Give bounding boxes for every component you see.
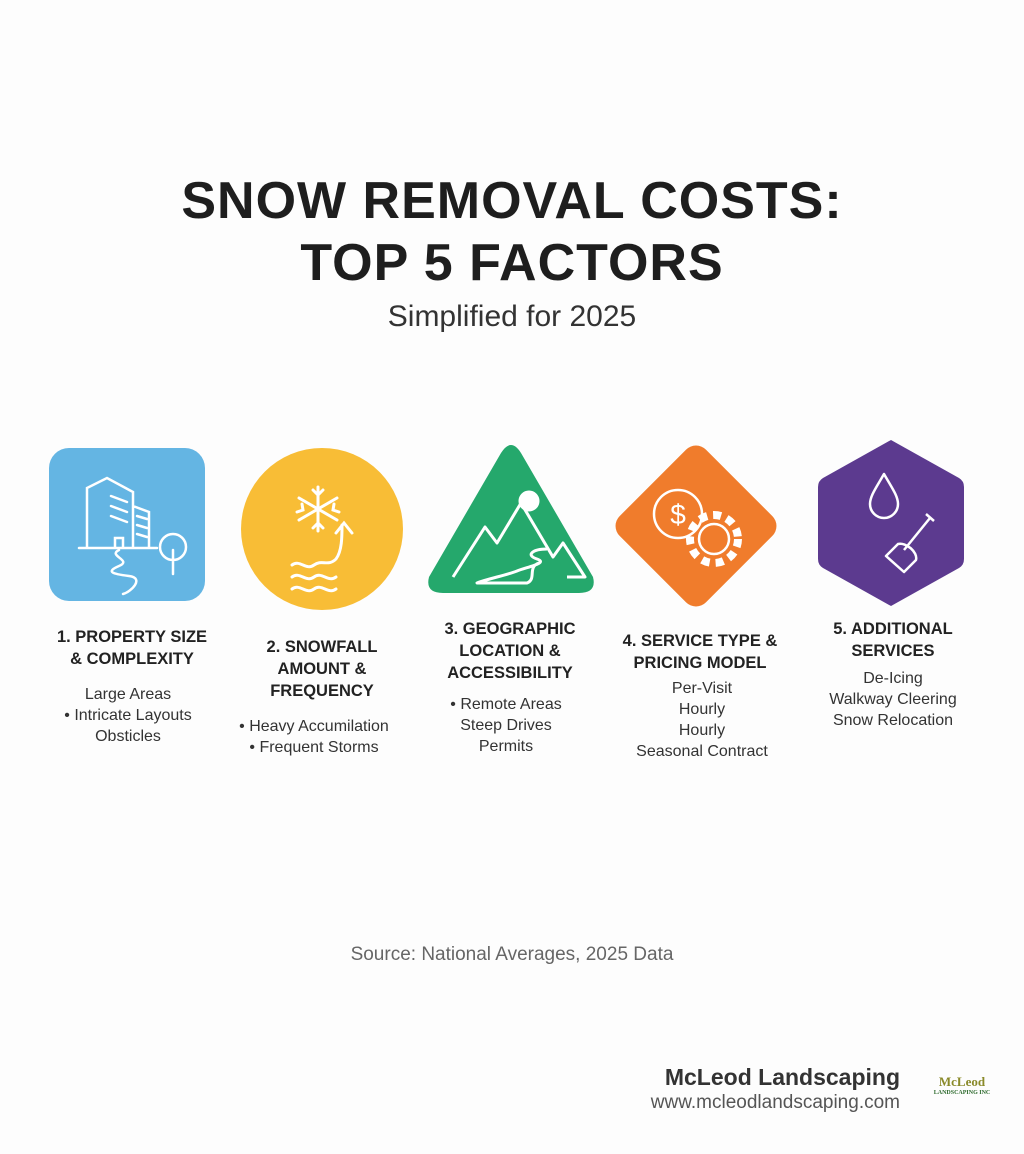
label 5: SERVICES xyxy=(851,642,935,660)
items 2: • Frequent Storms xyxy=(249,739,379,756)
title: SNOW REMOVAL COSTS: xyxy=(181,172,843,230)
icon: snowfall xyxy=(241,448,403,610)
logo: McLeod xyxy=(939,1074,985,1089)
items 3: Steep Drives xyxy=(460,717,552,734)
items 4: Seasonal Contract xyxy=(636,743,768,760)
items 3 xyxy=(450,696,562,755)
items 1: • Intricate Layouts xyxy=(64,707,192,724)
label 2 xyxy=(267,638,377,700)
label 2: AMOUNT & xyxy=(278,660,366,678)
items 4: Per-Visit xyxy=(672,680,732,697)
source note: Source: National Averages, 2025 Data xyxy=(351,944,673,965)
label 3 xyxy=(444,620,576,682)
items 1: Large Areas xyxy=(85,686,171,703)
items 5 xyxy=(829,670,957,729)
label 5 xyxy=(833,620,953,660)
icon: property size xyxy=(49,448,205,601)
label 1 xyxy=(57,628,207,668)
icon: service type: $ xyxy=(670,499,686,530)
label 2: 2. SNOWFALL xyxy=(267,638,377,656)
logo: LANDSCAPING INC xyxy=(934,1090,990,1096)
items 2: • Heavy Accumilation xyxy=(239,718,389,735)
label 1: 1. PROPERTY SIZE xyxy=(57,628,207,646)
logo xyxy=(934,1074,990,1096)
title xyxy=(181,172,843,292)
items 3: • Remote Areas xyxy=(450,696,562,713)
icon: service type xyxy=(616,446,776,606)
subtitle: Simplified for 2025 xyxy=(388,300,636,333)
items 3: Permits xyxy=(479,738,533,755)
icon: geographic xyxy=(428,445,594,593)
items 4 xyxy=(636,680,768,760)
icon: additional services xyxy=(818,440,964,606)
footer brand xyxy=(650,1064,900,1113)
items 4: Hourly xyxy=(679,701,725,718)
title: TOP 5 FACTORS xyxy=(300,234,724,292)
items 2 xyxy=(239,718,389,756)
label 1: & COMPLEXITY xyxy=(70,650,194,668)
label 2: FREQUENCY xyxy=(270,682,374,700)
label 5: 5. ADDITIONAL xyxy=(833,620,953,638)
label 3: ACCESSIBILITY xyxy=(447,664,573,682)
items 5: Walkway Cleering xyxy=(829,691,957,708)
label 4: PRICING MODEL xyxy=(634,654,766,672)
items 5: Snow Relocation xyxy=(833,712,953,729)
items 1: Obsticles xyxy=(95,728,161,745)
footer brand: www.mcleodlandscaping.com xyxy=(651,1092,900,1113)
label 3: LOCATION & xyxy=(459,642,561,660)
label 4 xyxy=(622,632,777,672)
footer brand: McLeod Landscaping xyxy=(665,1064,900,1090)
label 4: 4. SERVICE TYPE & xyxy=(623,632,777,650)
items 1 xyxy=(64,686,192,745)
label 3: 3. GEOGRAPHIC xyxy=(444,620,576,638)
items 5: De-Icing xyxy=(863,670,923,687)
items 4: Hourly xyxy=(679,722,725,739)
